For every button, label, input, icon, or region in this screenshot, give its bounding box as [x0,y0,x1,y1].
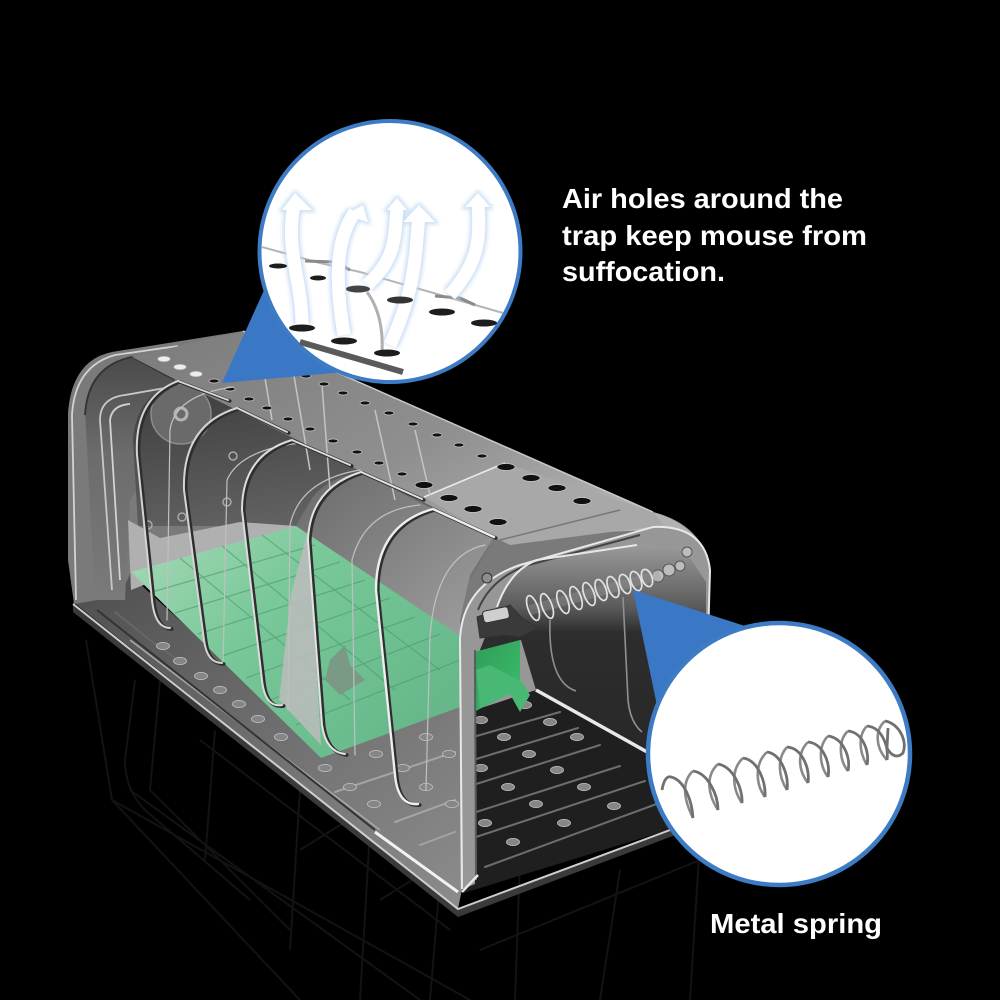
dark rim bar [300,342,403,372]
air holes [269,264,497,356]
rib dark shadows [139,382,496,805]
green floor grid lines [152,535,460,725]
text: air holes caption: Air holes around the [562,183,843,214]
transparent tunnel body [68,331,710,758]
trap base plate [73,570,678,917]
trigger mechanism shape [325,645,365,695]
back arch outlines [72,346,178,600]
green bait floor [131,526,460,758]
body silhouette [68,331,710,758]
connecting tube [367,292,382,353]
rear rib shapes seen through entrance [550,597,642,732]
roof long ribs [262,360,430,500]
text: air holes caption: suffocation. [562,256,725,287]
text: air holes caption: trap keep mouse from [562,220,867,251]
side wall panels [133,381,494,640]
folded edge marks [305,261,475,305]
mirror reflection of the trap [86,640,700,1000]
text: air holes caption [562,183,867,287]
spring rod [530,575,660,610]
trap edge line [262,247,503,313]
back arch inner panel [85,357,200,600]
callout circle: air holes [260,121,520,382]
circle disc [260,121,520,382]
latch hardware left [477,573,538,638]
rib 3 [242,440,350,705]
front arch highlight lines [460,527,710,892]
roof lighter front section [424,463,664,545]
spring back strands [685,721,887,818]
rib 4 [308,472,422,754]
side rail of entrance [536,690,649,753]
floor rivet holes [156,642,620,846]
five rib arches [137,381,496,805]
front entrance [460,527,710,892]
wall holes and pivot screw [144,384,237,529]
circle disc [648,623,910,885]
callout pointer: air holes [222,288,345,383]
metal spring inside trap [524,568,655,622]
grey door panel [279,530,321,745]
floor under the tunnel, grey section [73,570,462,909]
front side wall panel [296,472,494,638]
base rim lines [73,604,678,909]
door brace and hinge [476,665,530,712]
base plate thickness edge [73,604,678,917]
arrow glows [282,193,490,345]
light grey wall band [128,520,296,590]
text: metal spring caption: Metal spring [710,908,882,939]
faint ghost arcs [167,387,485,790]
interior seen through entrance [476,545,706,754]
callout circle: metal spring [648,623,910,885]
spring front strands [662,721,904,818]
latch hardware right [652,547,692,582]
rib 5 [376,509,494,804]
floor inside the entrance, dark section [462,685,678,893]
roof air holes [158,356,591,526]
roof [132,331,706,552]
front arch face [460,527,710,890]
rib 2 [184,408,287,663]
roof edges [243,331,653,540]
green door [474,640,520,712]
air arrows [282,193,490,345]
rib 1 [137,381,228,628]
callout pointer: spring [633,590,745,720]
floor slots [115,612,662,867]
